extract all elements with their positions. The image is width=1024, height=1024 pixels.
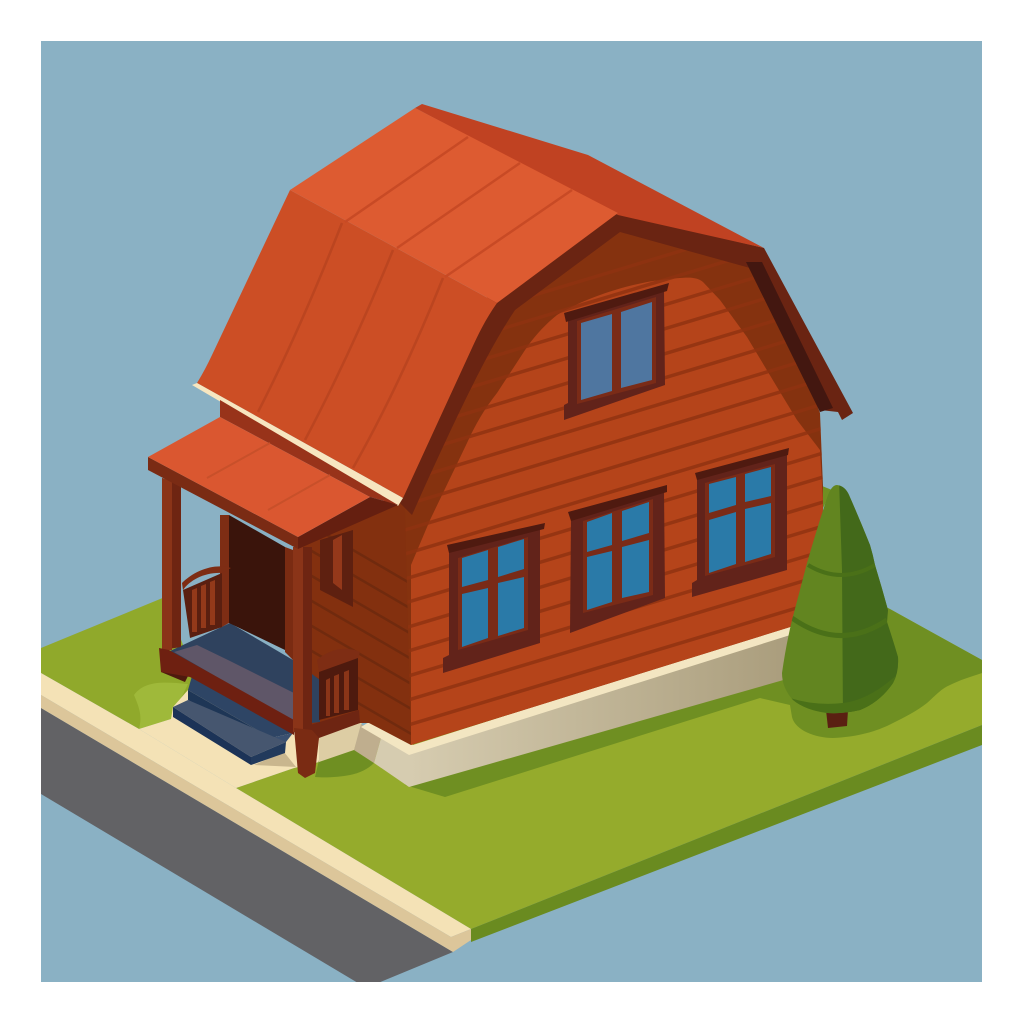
house and tree shadow — [405, 590, 982, 797]
porch cream underlay — [139, 690, 362, 788]
gable trim — [400, 213, 853, 515]
ground and street — [41, 486, 982, 983]
porch floor — [168, 623, 320, 725]
porch shadow on lawn — [315, 749, 374, 777]
sidewalk side — [41, 695, 471, 952]
side siding — [312, 535, 411, 735]
step shadow on path — [254, 752, 296, 767]
porch fascia right — [298, 497, 398, 549]
road — [41, 708, 453, 983]
lawn edge — [471, 725, 982, 942]
side wall — [302, 496, 411, 745]
porch roof fascia — [148, 457, 298, 549]
sidewalk top — [41, 673, 471, 937]
lower step — [173, 700, 286, 765]
door opening — [229, 515, 285, 650]
siding lines — [411, 278, 823, 726]
side beam — [300, 710, 360, 738]
upper seams — [345, 137, 572, 277]
right railing — [317, 649, 360, 720]
upper roof slope — [290, 108, 618, 303]
foliage — [782, 485, 898, 714]
side window — [320, 530, 353, 607]
door side — [285, 547, 293, 660]
floor beam — [159, 648, 294, 735]
back post — [220, 515, 229, 628]
main roof — [192, 104, 764, 506]
cream eave — [192, 383, 403, 506]
foundation — [354, 615, 822, 787]
foundation front — [409, 625, 822, 787]
under-porch beam shade — [161, 660, 190, 682]
upper step — [188, 676, 293, 745]
post foot — [294, 728, 319, 778]
under eave strip — [220, 400, 398, 505]
front post — [293, 547, 312, 732]
lower roof slope — [197, 190, 497, 498]
back lawn left — [41, 597, 200, 729]
tree — [782, 485, 898, 728]
porch floor lit — [174, 645, 294, 722]
lower left window — [443, 523, 545, 673]
porch roof seams — [207, 443, 330, 510]
porch roof — [148, 417, 370, 537]
upper window — [564, 283, 669, 420]
foundation corner shade — [354, 724, 381, 763]
foundation ledge — [361, 615, 822, 755]
left railing — [182, 566, 231, 638]
porch — [148, 400, 398, 778]
under porch wall — [319, 722, 362, 762]
lower middle window — [568, 485, 667, 633]
trunk — [826, 710, 848, 728]
foundation side — [374, 738, 409, 787]
front wall — [405, 206, 830, 745]
lit area — [411, 278, 830, 745]
front lawn — [236, 608, 982, 929]
tree backdrop sliver — [822, 486, 831, 508]
lower seams — [258, 223, 443, 468]
lower right window — [692, 448, 789, 597]
back roof strip — [415, 104, 764, 248]
lawn highlight — [134, 683, 188, 729]
left post — [162, 478, 181, 650]
